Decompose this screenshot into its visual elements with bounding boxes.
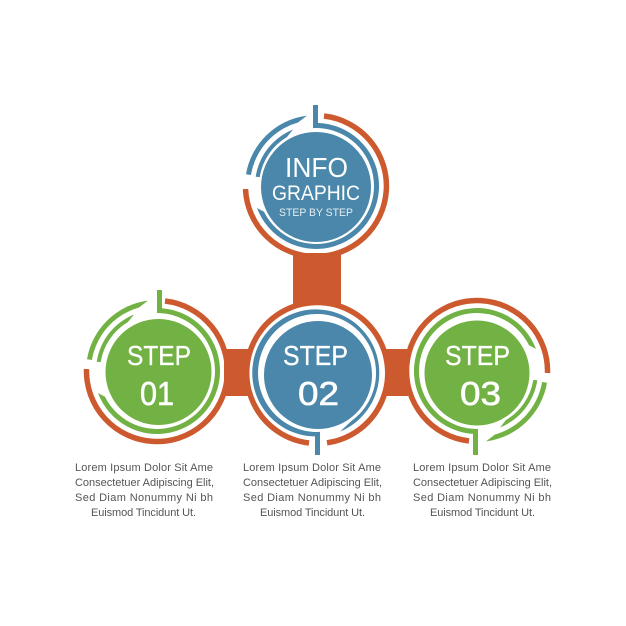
text block: step 01: Consectetuer Adipiscing Elit, (75, 477, 214, 489)
step 03 disc (424, 320, 530, 426)
text block: step 02: Euismod Tincidunt Ut. (260, 507, 365, 519)
text block: step 01: Sed Diam Nonummy Ni bh (75, 492, 213, 504)
text block: step 03: Consectetuer Adipiscing Elit, (413, 477, 552, 489)
step 03 label: STEP (445, 340, 510, 371)
text block: step 02: Sed Diam Nonummy Ni bh (243, 492, 381, 504)
title ring (246, 105, 386, 257)
text block: step 02: Consectetuer Adipiscing Elit, (243, 477, 382, 489)
step 01 label: STEP (127, 340, 191, 371)
heading: info: INFO (285, 152, 348, 183)
text block: step 02 (243, 462, 382, 519)
step 01 disc (106, 319, 212, 425)
text block: step 02: Lorem Ipsum Dolor Sit Ame (243, 462, 381, 474)
text block: step 01: Euismod Tincidunt Ut. (91, 507, 196, 519)
step 02 ring (247, 302, 388, 455)
step 02 number: 02 (298, 375, 339, 412)
step 02 disc (264, 321, 372, 429)
text block: step 03: Sed Diam Nonummy Ni bh (413, 492, 551, 504)
text block: step 03: Lorem Ipsum Dolor Sit Ame (413, 462, 551, 474)
step 01 ring (86, 290, 227, 442)
step 01 number: 01 (140, 375, 174, 412)
text block: step 01 (75, 462, 214, 519)
step 03 ring (407, 300, 548, 455)
text block: step 03: Euismod Tincidunt Ut. (430, 507, 535, 519)
title disc (261, 132, 371, 242)
step 01 circle (86, 290, 227, 442)
step 02 circle (247, 302, 388, 455)
top circle: infographic title (246, 105, 386, 257)
text block: step 01: Lorem Ipsum Dolor Sit Ame (75, 462, 213, 474)
step 03 circle (407, 300, 548, 455)
step 02 label: STEP (283, 340, 348, 371)
step 03 number: 03 (460, 375, 501, 412)
subheading: step by step: STEP BY STEP (279, 207, 353, 219)
text block: step 03 (413, 462, 552, 519)
connectors (224, 253, 408, 396)
heading: graphic: GRAPHIC (272, 182, 360, 205)
